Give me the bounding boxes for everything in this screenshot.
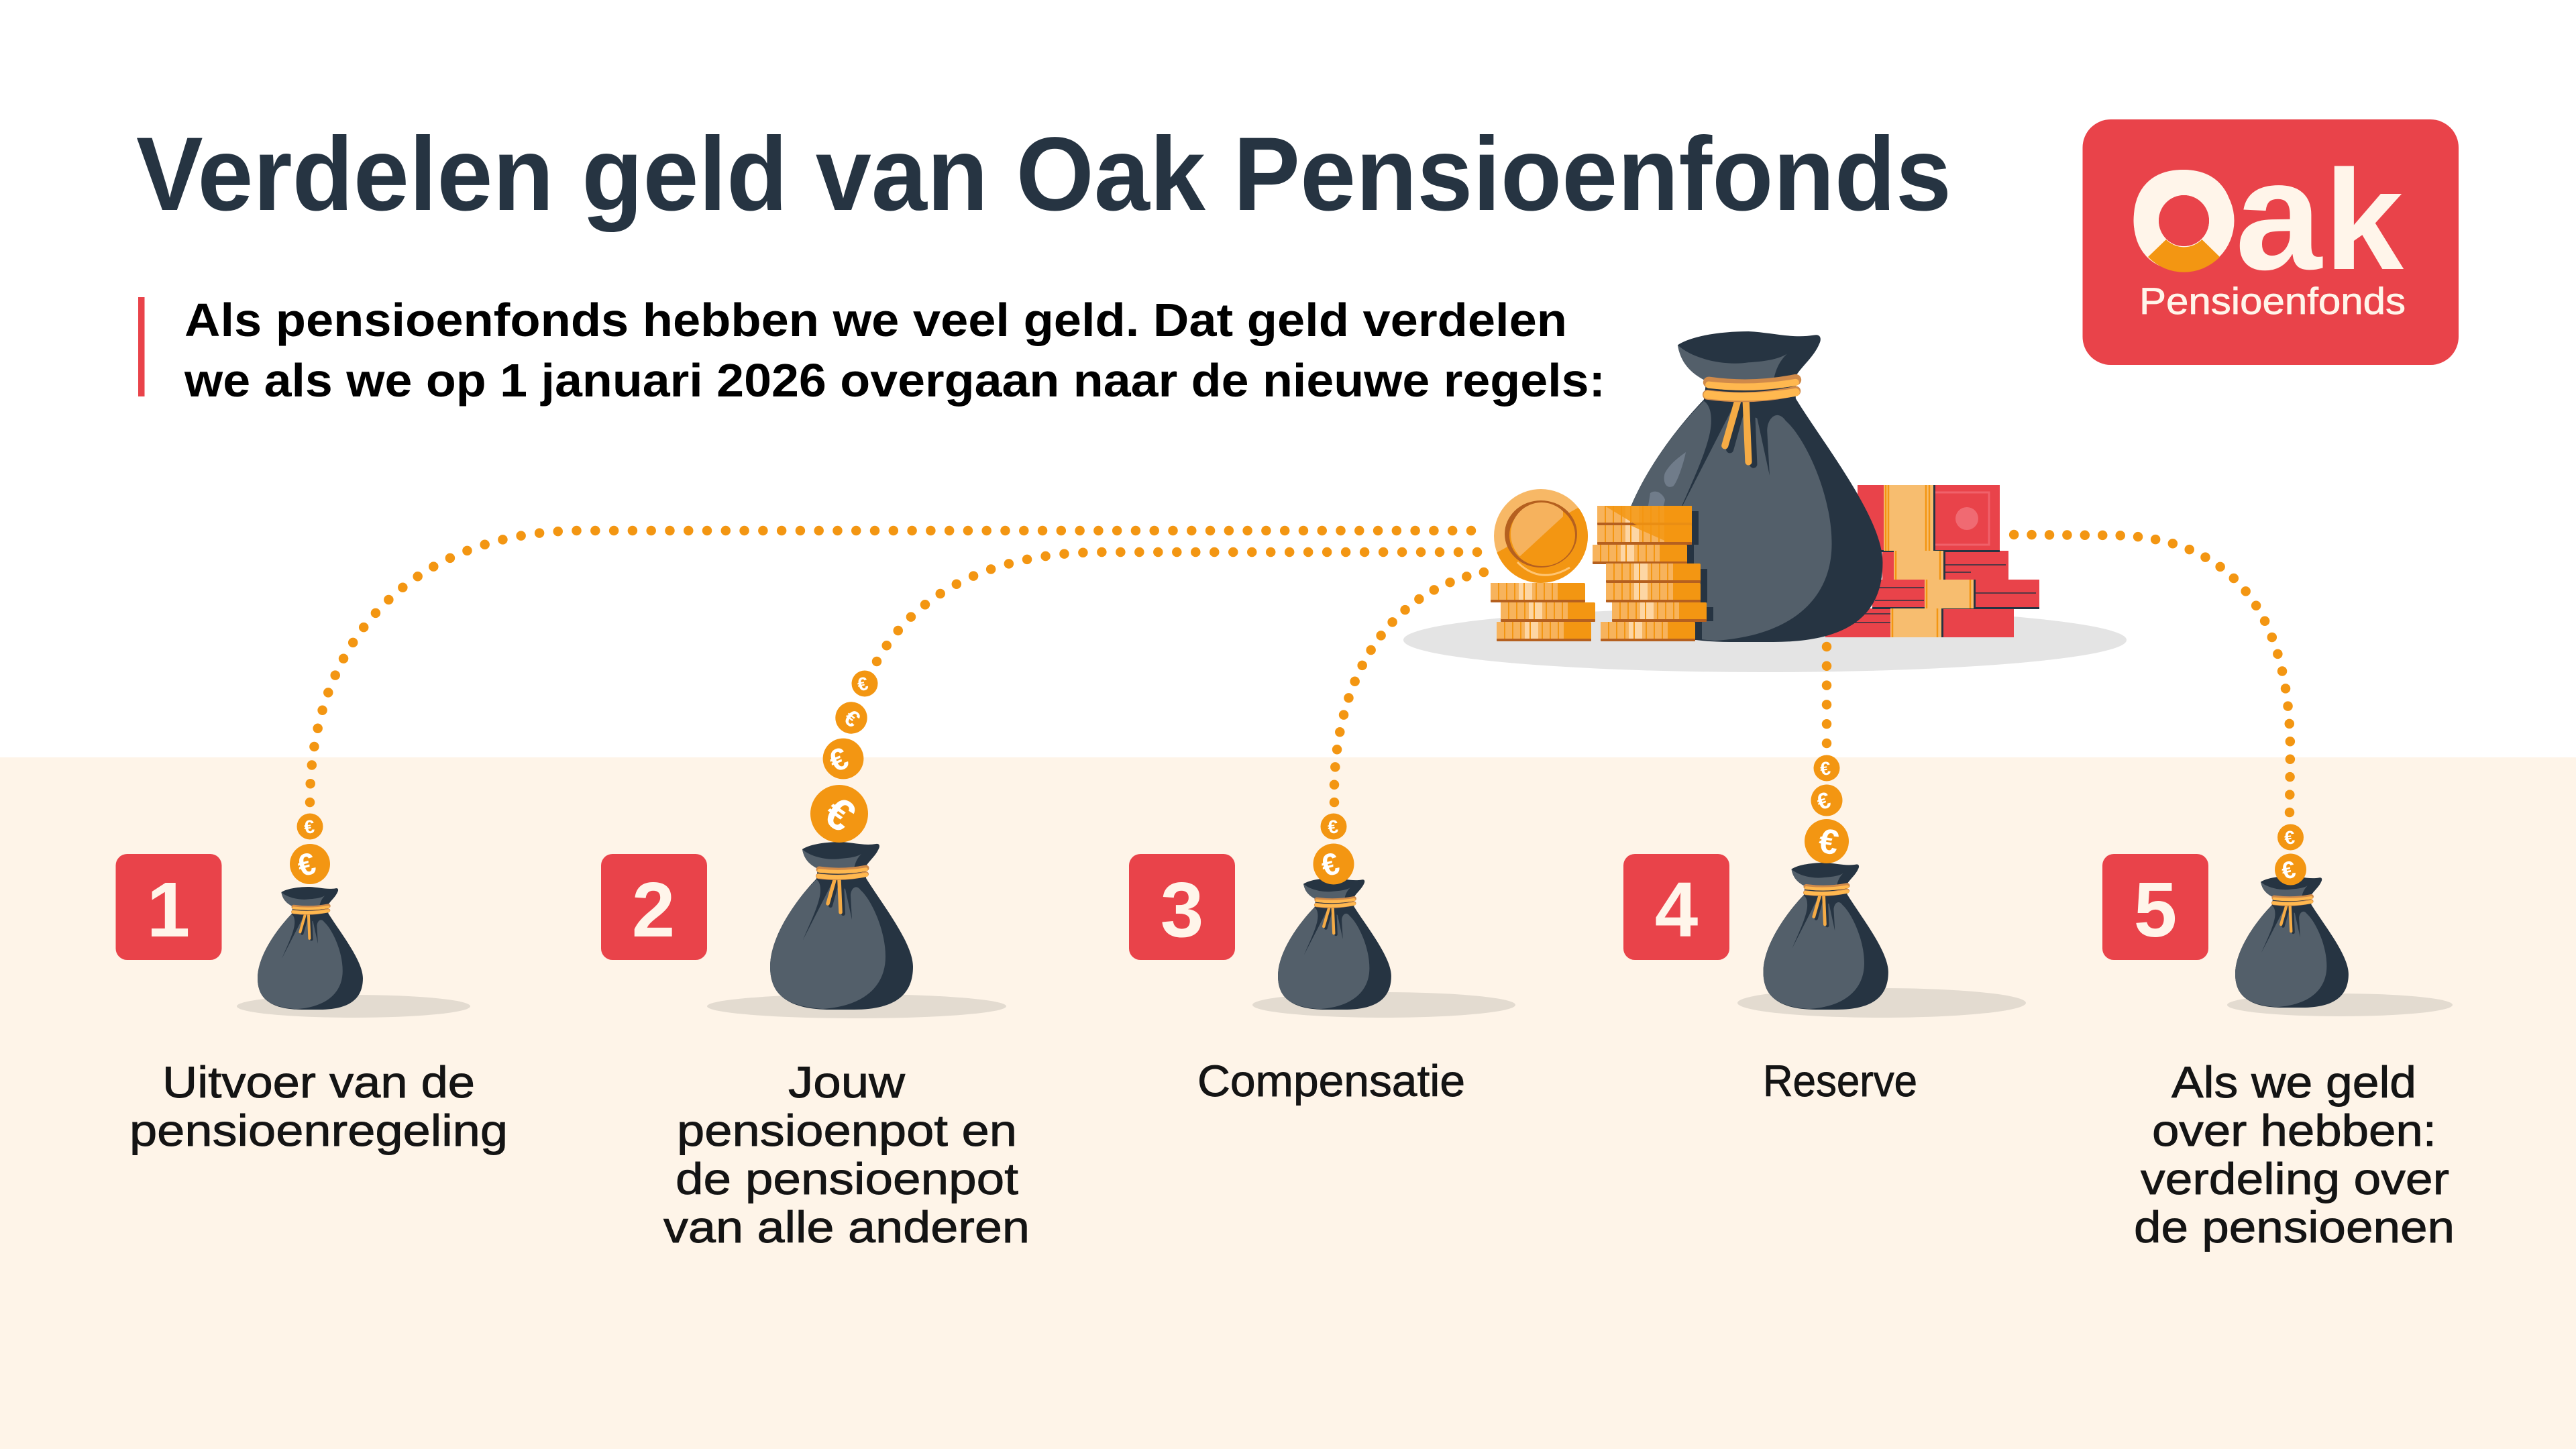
item 5 <box>2102 824 2455 1252</box>
label 2: Jouw <box>788 1057 905 1107</box>
label 1: pensioenregeling <box>129 1106 508 1155</box>
label 5: verdeling over <box>2141 1154 2449 1203</box>
path to item 1 <box>310 531 1471 802</box>
label 5: over hebben: <box>2152 1106 2436 1155</box>
intro line 2: we als we op 1 januari 2026 overgaan naar de nieuwe regels: <box>184 354 1605 407</box>
coins 4: € <box>1819 757 1832 780</box>
big money bag <box>1618 331 1882 642</box>
item 3 <box>1129 813 1515 1106</box>
label 5: Als we geld <box>2171 1057 2416 1107</box>
coin stack left <box>1491 583 1595 641</box>
label 4: Reserve <box>1763 1056 1917 1106</box>
coins 2: € <box>839 705 865 733</box>
label 5: de pensioenen <box>2134 1202 2455 1252</box>
title: Verdelen geld van Oak Pensioenfonds <box>136 116 1951 233</box>
label 2: van alle anderen <box>663 1202 1030 1252</box>
coins 1: € <box>303 816 316 838</box>
logo: a <box>2235 129 2323 303</box>
logo <box>2082 119 2459 365</box>
path to item 2 <box>877 552 1477 661</box>
intro text block <box>138 294 1605 407</box>
label 2 <box>663 1057 1030 1252</box>
ground shadow <box>1403 608 2127 672</box>
coins 4: € <box>1814 788 1834 816</box>
coin stack right <box>1593 506 1707 641</box>
coins 4 <box>1805 755 1849 863</box>
label 2: de pensioenpot <box>676 1154 1018 1203</box>
coins 5 <box>2275 824 2306 885</box>
coins 2: € <box>855 673 870 695</box>
banknote stack <box>1825 485 2039 637</box>
label 1 <box>129 1057 508 1155</box>
badge 3: 3 <box>1161 866 1203 953</box>
badge 4 <box>1623 854 1729 960</box>
path to item 5 <box>2014 535 2290 812</box>
big coin <box>1494 489 1588 583</box>
bag 3 <box>1252 878 1515 1018</box>
label 5 <box>2134 1057 2455 1252</box>
label 3: Compensatie <box>1197 1056 1465 1106</box>
badge 1 <box>115 854 221 960</box>
bag 1 <box>237 887 470 1018</box>
item 2 <box>601 671 1030 1252</box>
accent bar <box>138 297 145 396</box>
background band <box>0 757 2576 1449</box>
coins 5: € <box>2279 855 2298 885</box>
path to item 4 <box>1822 647 1831 743</box>
bag 2 <box>707 842 1006 1018</box>
badge 4: 4 <box>1655 866 1698 953</box>
badge 2: 2 <box>632 866 675 953</box>
logo: Pensioenfonds <box>2139 280 2406 322</box>
item 4 <box>1623 755 2026 1106</box>
coins 3: € <box>1318 845 1343 883</box>
path to item 3 <box>1334 572 1484 802</box>
coins 2 <box>810 671 877 843</box>
coins 3: € <box>1327 816 1340 838</box>
item 1 <box>115 813 508 1155</box>
badge 1: 1 <box>147 866 190 953</box>
coins 5: € <box>2284 826 2296 849</box>
coins 1: € <box>294 845 319 883</box>
dotted paths <box>310 531 2290 812</box>
label 1: Uitvoer van de <box>162 1057 475 1107</box>
bag 5 <box>2227 876 2453 1016</box>
logo: k <box>2324 140 2404 299</box>
badge 5: 5 <box>2134 866 2177 953</box>
badge 5 <box>2102 854 2208 960</box>
intro line 1: Als pensioenfonds hebben we veel geld. Dat geld verdelen <box>184 294 1567 346</box>
coins 1 <box>290 813 330 884</box>
label 2: pensioenpot en <box>677 1106 1017 1155</box>
badge 2 <box>601 854 707 960</box>
bag 4 <box>1737 863 2026 1018</box>
stack shadows <box>1687 511 1713 640</box>
coins 4: € <box>1816 821 1841 863</box>
logo: O <box>2128 140 2239 299</box>
central illustration: money bag, coins and banknotes <box>1403 331 2127 672</box>
coins 3 <box>1313 813 1354 884</box>
badge 3 <box>1129 854 1235 960</box>
coins 2: € <box>816 786 864 841</box>
coins 2: € <box>824 740 853 779</box>
